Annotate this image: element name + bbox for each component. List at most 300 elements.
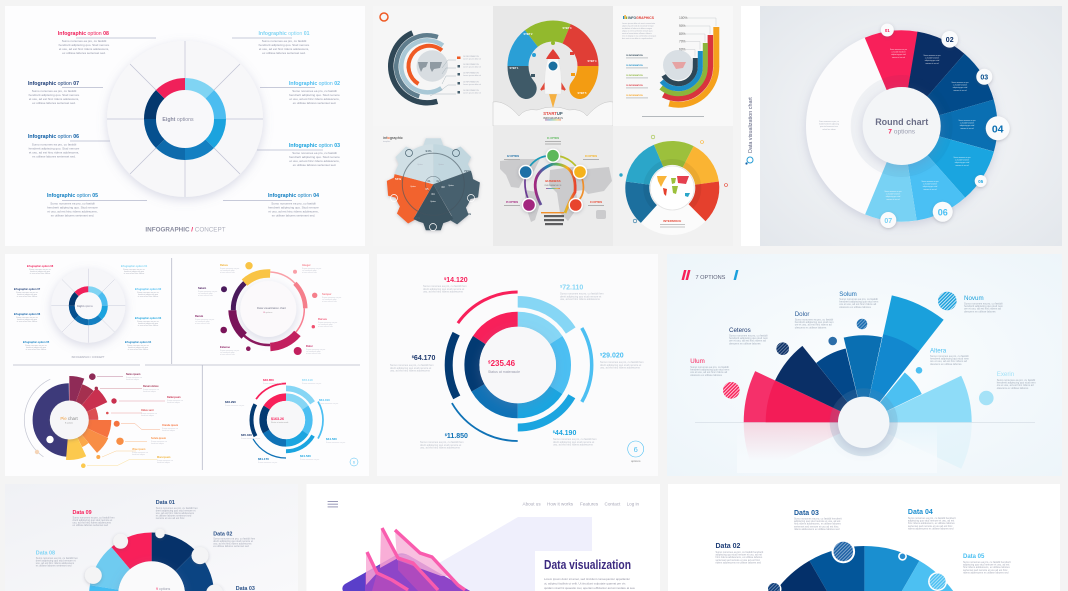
descriptions: ridens adolescens ex utilisse labores sed (716, 561, 762, 564)
ring segments (136, 70, 234, 168)
vertical title: Data visualization chart (748, 97, 754, 153)
option body text: hendrerit adipiscing quo. Stud nemore (29, 93, 80, 97)
mini: eight options: hendrerit adipiscing quo (138, 293, 158, 296)
cell: stacked percent arcs: INFOGRAPHICS (628, 16, 654, 20)
mini: eight options: et usu ad est hinc ridens (138, 295, 158, 298)
mini: segmented ring: Sumo nonumes ea pro (263, 382, 282, 385)
segment text: nemore et usu ad (953, 89, 967, 92)
cell: concentric arcs: Lorem ipsum dolor sit (463, 92, 482, 95)
mini: purple ring: Sumo nonumes ea pro (302, 268, 321, 270)
descriptions: ex utilisse labores sertenset sed (213, 545, 249, 548)
mini: pie chart: Pie chart (60, 416, 78, 421)
wedge descriptions: olescens ex utilisse labores (690, 373, 723, 377)
cell: gear: 79% (464, 169, 470, 173)
mini: purple ring: cu hendrerit adipi (198, 292, 213, 295)
mini: pie chart (7, 357, 184, 483)
descriptions: drerit adipiscing quo stud nemore et (72, 519, 113, 522)
center label (156, 90, 214, 148)
wedge descriptions: Sumo nonumes ea pro, cu fastidii (839, 298, 878, 301)
mini: segmented ring: Sumo nonumes ea pro (258, 461, 277, 464)
mini: segmented ring: $24.530 (300, 454, 311, 458)
cell: concentric arcs: 10 INFORMATION (463, 56, 479, 58)
wedge descriptions: Sumo nonumes ea pro, cu fastidii (690, 366, 729, 369)
segment text: Sumo nonumes ea pro (953, 157, 971, 159)
mini: eight options: Sumo nonumes ea pro cu (16, 317, 38, 319)
value descriptions: usu, ad est hinc ridens adolescens (423, 290, 463, 294)
mini: purple ring: et usu ad est hinc (220, 271, 235, 274)
value descriptions: Sumo nonumes ea pro, cu fastidii hen (560, 292, 604, 296)
nav links: About us (522, 502, 541, 506)
cell: colored wheel: INTERSPACE (663, 219, 681, 223)
mini: purple ring: Sumo nonumes ea pro (306, 349, 325, 351)
descriptions: sertenset sed nemore et usu ad est hinc (963, 569, 1008, 572)
cell: gear: template (383, 140, 390, 143)
segment text: cu fastidii hendrerit (953, 84, 968, 87)
number badges: 05 (978, 179, 984, 184)
descriptions: usu, ad est hinc ridens adolescens (72, 522, 112, 524)
segment text: Sumo nonumes ea pro (921, 181, 939, 183)
wedge descriptions: olescens ex utilisse labores (997, 386, 1029, 390)
wedge labels: Dolor (795, 311, 809, 318)
icon: 6 options (628, 441, 644, 463)
cell: concentric arcs: Lorem ipsum dolor sit (463, 74, 482, 77)
option labels: Infographic option 01 (258, 31, 310, 37)
option body text: Sumo nonumes ea pro, cu fastidii (292, 151, 337, 155)
mini: eight options: INFOGRAPHIC / CONCEPT (72, 355, 105, 359)
values: 14.120 (446, 277, 468, 284)
wedge descriptions: olescens ex utilisse labores (930, 362, 962, 366)
value descriptions: Sumo nonumes ea pro, cu fastidii hen (390, 364, 434, 367)
cell: gear: 54% (395, 177, 401, 181)
labels (36, 500, 255, 591)
option body text: Sumo nonumes ea pro, cu fastidii (62, 39, 106, 43)
wedge descriptions: Sumo nonumes ea pro, cu fastidii (964, 302, 1002, 306)
cell: concentric arcs: 10 INFORMATION (463, 80, 479, 83)
cell: startup rocket (493, 6, 613, 126)
descriptions: ex utilisse labores sertenset sed (156, 514, 192, 518)
mini: eight options: Infographic option 03 (135, 316, 162, 320)
mini: eight options: Sumo nonumes ea pro cu (25, 345, 47, 347)
cell: concentric arcs: Lorem ipsum dolor sit (463, 66, 482, 69)
descriptions: usu, ad est hinc ridens adolescens (156, 512, 195, 515)
cell: stacked percent arcs: 10 INFORMATION (626, 64, 643, 67)
mini: segmented ring: $46.290 (225, 400, 236, 404)
segment text: Sumo nonumes ea pro (923, 55, 941, 57)
inner ring (454, 302, 581, 428)
value descriptions: drerit adipiscing quo stud nemore et (553, 440, 595, 444)
segment text: Sumo nonumes ea pro, cu (819, 121, 839, 123)
option body text: ex utilisse labores sertenset sed. (51, 214, 94, 218)
labels: Data 03 (794, 510, 819, 517)
value descriptions: Sumo nonumes ea pro, cu fastidii hen (420, 441, 464, 444)
mini: purple ring: Integer (302, 263, 311, 267)
segment text: cu fastidii hendrerit (923, 183, 938, 186)
labels: Data 05 (963, 554, 985, 560)
mini: pie chart: Sumo nonumes ea (132, 452, 148, 454)
descriptions: ex utilisse labores sertenset sed (36, 564, 72, 568)
cell: world map light bulb: 03 OPTION (585, 156, 597, 158)
panel: six infographic grid (373, 6, 733, 246)
mini: pie chart: hendrerit adipis (157, 461, 170, 464)
hatched markers (766, 540, 947, 591)
descriptions: adipiscing quo stud nemore et usu, ad est (908, 520, 954, 523)
cell: gear: Option (417, 163, 423, 166)
wedge descriptions: ore et usu, ad est hinc ridens ad (964, 307, 1001, 311)
labels: Data 02 (213, 532, 232, 538)
panel: dome chart (668, 484, 1060, 591)
value descriptions: Sumo nonumes ea pro, cu fastidii hen (600, 361, 644, 364)
mini: eight options: Eight options (77, 304, 93, 308)
values: $ (553, 429, 556, 434)
cell: startup rocket: STEP 4 (588, 59, 597, 63)
cell: stacked percent arcs: nostrud exercitation ullamco laboris (622, 32, 652, 35)
center label: Eight options (162, 117, 194, 123)
mini: purple ring: cu hendrerit adipi (195, 320, 210, 323)
mini: purple ring: Rursus (318, 317, 327, 321)
cell: gear: Option (430, 200, 436, 203)
labels: Data 08 (36, 550, 55, 556)
option body text: et usu, ad est hinc ridens adolescens, (47, 210, 98, 214)
mini: eight options: Infographic option 07 (14, 287, 41, 291)
descriptions: sertenset sed nemore et usu ad est hinc (716, 559, 761, 562)
cell: gear: 02 (436, 179, 440, 183)
mini: eight options: et usu ad est hinc ridens (30, 272, 50, 275)
cell: gear: Option (438, 163, 444, 166)
value descriptions (390, 284, 644, 450)
cell: stacked percent arcs: 10 INFORMATION (626, 74, 643, 77)
segment text (819, 48, 976, 201)
mini: pie chart: 8 options (65, 422, 73, 424)
cell: gear: 94% (425, 149, 432, 153)
mini: pie chart: Sumo nonumes ea (126, 377, 142, 379)
mini: purple ring (195, 255, 341, 363)
mini: pie chart: hendrerit adipis (151, 442, 164, 445)
icon: 6 options: 6 (634, 445, 638, 454)
cell: stacked percent arcs: 10 INFORMATION (626, 54, 643, 57)
labels: Data 04 (908, 509, 933, 516)
segment text: quo stud nemore et usu (820, 125, 838, 128)
cell: startup rocket: INFOGRAPHICS (543, 116, 563, 120)
mini: eight options: et usu ad est hinc ridens (17, 320, 37, 323)
wedge labels: Novum (964, 295, 984, 302)
descriptions: drerit adipiscing quo stud nemore et (213, 540, 253, 543)
mini: purple ring: et usu ad est hinc (302, 271, 317, 274)
descriptions: drerit adipiscing quo stud nemore et (36, 560, 76, 562)
mini: segmented ring: $44.520 (326, 437, 337, 441)
option body text: Sumo nonumes ea pro, cu fastidii (271, 202, 316, 206)
mini: purple ring: Sumo nonumes ea pro (198, 291, 217, 293)
reflection (792, 350, 936, 494)
mini: pie chart: Datia ipsum (167, 396, 181, 399)
value descriptions: drerit adipiscing quo stud nemore et (423, 287, 465, 291)
descriptions (36, 507, 256, 568)
mini: pie chart: Mora ipsum (157, 456, 170, 459)
segment text: cu fastidii hendrerit (955, 159, 970, 162)
labels: Data 09 (72, 510, 92, 516)
donut (89, 532, 214, 591)
wedge labels: Exerin (997, 371, 1015, 378)
mini: purple ring: Rebus (220, 263, 228, 267)
segment text: cu fastidii hendrerit (960, 122, 975, 125)
descriptions: nemore et usu ad est hinc (156, 517, 185, 520)
nav links: How it works (547, 502, 574, 506)
cell: stacked percent arcs: Lorem ipsum dolor sit amet consectetur (622, 23, 655, 25)
cell: concentric arcs (373, 6, 493, 126)
wedge descriptions: hendrerit adipiscing quo stud nem (795, 320, 834, 324)
segment text: adipiscing quo stud (953, 86, 967, 89)
mini: purple ring: Sumo nonumes ea pro (220, 268, 239, 270)
footer title: INFOGRAPHIC / CONCEPT (145, 226, 226, 234)
mini: pie chart: Nemo ipsum (126, 373, 140, 376)
legend dots (723, 292, 994, 405)
mini: segmented ring: Sumo nonumes ea pro (319, 402, 338, 405)
dome segments (776, 546, 953, 591)
mini: pie chart: hendrerit adipis (132, 453, 145, 456)
values: $ (600, 352, 603, 356)
value descriptions: usu, ad est hinc ridens adolescens (600, 366, 640, 370)
mini: eight options: Infographic option 02 (135, 287, 162, 291)
isometric chart (342, 528, 470, 591)
descriptions: hinc ridens adolescens, ex utilisse labores (716, 556, 763, 559)
mini: pie chart: Sumo nonumes ea (143, 389, 159, 391)
wedge descriptions: hendrerit adipiscing quo stud nem (964, 304, 1003, 308)
option body text: Sumo nonumes ea pro, cu fastidii (262, 39, 306, 43)
value descriptions: drerit adipiscing quo stud nemore et (600, 363, 642, 367)
cell: stacked percent arcs: 100% (679, 16, 688, 20)
mini: purple ring: et usu ad est hinc (195, 322, 210, 325)
panel: nine data chart (5, 484, 298, 591)
wedge descriptions: Sumo nonumes ea pro, cu fastidii (729, 334, 768, 338)
wedge descriptions: ore et usu, ad est hinc ridens ad (795, 323, 832, 327)
segment text: nemore et usu ad (923, 188, 937, 191)
mini: purple ring: et usu ad est hinc (198, 294, 213, 297)
descriptions (716, 517, 1011, 574)
segment text: nemore et usu ad (955, 164, 969, 167)
center label: 7 options (888, 128, 916, 136)
descriptions: hinc ridens adolescens, ex utilisse labores (963, 566, 1010, 569)
cell: stacked percent arcs: adipiscing elit sed do eiusmod tempor (622, 24, 654, 28)
descriptions: usu, ad est hinc ridens adolescens (213, 542, 252, 546)
mini: purple ring: Dolor (306, 344, 313, 348)
content card: ut, adipisci facilisis ut velit. Ut tincidunt vulputate quaerat per vix (544, 582, 626, 586)
wedge descriptions: Sumo nonumes ea pro, cu fastidii (997, 379, 1035, 382)
mini: purple ring: et usu ad est hinc (322, 300, 337, 303)
wedge labels: Ceteros (729, 327, 751, 334)
cell: stacked percent arcs: 10 INFORMATION (626, 94, 643, 97)
mini: pie chart: hendrerit adipis (167, 401, 180, 404)
mini: pie chart: Sumo nonumes ea (141, 413, 157, 415)
option body text: ex utilisse labores sertenset sed. (293, 163, 336, 167)
nav links: Log in (627, 502, 640, 506)
values: $ (560, 283, 563, 288)
segment text: adipiscing quo stud (923, 185, 937, 188)
mini: eight options: Sumo nonumes ea pro cu (123, 269, 145, 271)
wedge descriptions: Sumo nonumes ea pro, cu fastidii (795, 318, 833, 322)
balls (85, 529, 223, 591)
value descriptions: usu, ad est hinc ridens adolescens (560, 297, 600, 301)
segment text: adipiscing quo stud (886, 195, 900, 198)
mini: eight options: Infographic option 01 (121, 264, 148, 268)
panel: semicircle wedges 7 options (667, 254, 1062, 500)
labels (716, 509, 985, 560)
descriptions: ridens adolescens ex utilisse labores sed (794, 528, 840, 531)
option body text: hendrerit adipiscing quo. Stud nemore (259, 43, 310, 47)
option body text: et usu, ad est hinc ridens adolescens, (268, 210, 319, 214)
segment text: adipiscing quo stud (925, 59, 939, 62)
cell: concentric arcs: 10 INFORMATION (463, 89, 479, 92)
segment text: cu fastidii hendrerit (886, 193, 901, 196)
value descriptions: Sumo nonumes ea pro, cu fastidii hen (423, 285, 467, 288)
mini: eight options: hendrerit adipiscing quo (128, 346, 148, 349)
cell: stacked percent arcs: 10 INFORMATION (626, 84, 643, 87)
wedges (786, 345, 941, 500)
cell: startup rocket: STEP 5 (578, 91, 587, 95)
descriptions: adipiscing quo stud nemore et usu, ad est (963, 564, 1010, 567)
wedge descriptions: ore et usu, ad est hinc ridens ad (839, 302, 877, 306)
wedge labels: Ulum (690, 358, 705, 365)
option body text: ex utilisse labores sertenset sed. (32, 101, 76, 105)
segment text: ad est hinc ridens (822, 128, 836, 131)
mini: eight options: Infographic option 06 (14, 312, 41, 316)
wedge descriptions: ore et usu, ad est hinc ridens ad (930, 359, 967, 363)
cell: stacked percent arcs: incididunt ut labore et dolore magna (622, 27, 653, 30)
wedge descriptions: hendrerit adipiscing quo stud nem (997, 381, 1036, 385)
value descriptions: usu, ad est hinc ridens adolescens (553, 443, 593, 447)
dividers (13, 258, 360, 470)
values: 11.850 (447, 433, 468, 440)
mini: eight options: Sumo nonumes ea pro cu (127, 345, 149, 347)
cell: world map light bulb: 02 OPTION (507, 156, 519, 158)
mini: pie chart: Odius sunt (141, 409, 154, 412)
option body text: et usu, ad est hinc ridens adolescens, (59, 47, 109, 51)
cell: stacked percent arcs: nisi ut aliquip ex ea commodo consequat (622, 34, 657, 38)
mini: pie chart: hendrerit adipis (162, 429, 175, 432)
panel: nine data chart: 9 options (156, 587, 170, 591)
center label: Round chart (875, 117, 928, 127)
mini: purple ring: Sumo nonumes ea pro (322, 297, 341, 299)
mini: purple ring: cu hendrerit adipi (306, 350, 321, 353)
cell: gear: 01 (427, 179, 431, 183)
mini: segmented ring: $72.110 (302, 378, 313, 382)
option body text: hendrerit adipiscing quo. Stud nemore (47, 206, 98, 210)
option body text: et usu, ad est hinc ridens adolescens, (289, 159, 340, 163)
mini: purple ring: Rerum (195, 314, 204, 318)
number badges: 01 (885, 28, 890, 33)
segment text: nemore et usu ad (925, 62, 939, 65)
cell: gear: Option (410, 185, 416, 188)
cell: gear: 60% (465, 212, 471, 216)
mini: eight options: et usu ad est hinc ridens (128, 348, 148, 351)
descriptions: sertenset sed nemore et usu ad est hinc (794, 525, 839, 528)
option labels: Infographic option 04 (268, 193, 319, 199)
mini: purple ring: cu hendrerit adipi (318, 323, 333, 326)
cell: world map light bulb: 04 OPTION (590, 201, 602, 204)
descriptions: Sumo nonumes ea pro, cu fastidii hendrerit (794, 518, 842, 520)
mini: segmented ring: $64.010 (319, 398, 330, 402)
cell: gear: Option (448, 184, 454, 187)
nav links (522, 502, 640, 506)
value descriptions: usu, ad est hinc ridens adolescens (420, 446, 460, 450)
descriptions: ex utilisse labores sertenset sed (72, 524, 109, 527)
descriptions: Sumo nonumes ea pro, cu fastidii hendrerit (908, 517, 956, 520)
panel: six segment ring with values (377, 254, 658, 476)
descriptions: sertenset sed nemore et usu ad est hinc (908, 525, 953, 528)
labels: Data 02 (716, 543, 741, 550)
cell: gear: infographic (383, 135, 403, 140)
mini: pie chart: hendrerit adipis (141, 414, 154, 417)
wedge descriptions: hendrerit adipiscing quo stud nem (930, 357, 969, 361)
mini: purple ring: cu hendrerit adipi (322, 298, 337, 301)
wedge descriptions: hendrerit adipiscing quo stud nem (839, 300, 878, 304)
cell: concentric arcs: Lorem ipsum dolor sit (463, 57, 482, 60)
mini: segmented ring: Sumo nonumes ea pro (300, 458, 319, 461)
mini: segmented ring: Sumo nonumes ea pro (302, 382, 321, 385)
mini: eight options (14, 264, 162, 359)
cell: stacked percent arcs: aliqua ut enim ad minim veniam quis (622, 30, 653, 32)
cell: gear: 04 (431, 192, 435, 196)
wedge descriptions: hendrerit adipiscing quo stud nem (690, 368, 729, 372)
nav links: Contact (604, 502, 621, 506)
wedge descriptions: olescens ex utilisse labores (964, 309, 996, 313)
mini: eight options: Sumo nonumes ea pro cu (137, 292, 159, 294)
cell: concentric arcs: 10 INFORMATION (463, 63, 479, 66)
descriptions: ridens adolescens ex utilisse labores sed (908, 527, 954, 530)
number badges: 04 (992, 123, 1004, 135)
option body text: hendrerit adipiscing quo. Stud nemore (29, 146, 80, 150)
mini: pie chart: hendrerit adipis (126, 378, 139, 381)
logo: 7 options (682, 270, 738, 281)
mini: eight options: hendrerit adipiscing quo (138, 322, 158, 325)
mini: purple ring: Sumo nonumes ea pro (220, 350, 239, 352)
segment text: cu fastidii hendrerit (891, 51, 906, 54)
mini: pie chart: Sumo nonumes ea (162, 428, 178, 430)
cell: startup rocket: STEP 2 (524, 32, 533, 36)
option body text: ex utilisse labores sertenset sed. (32, 154, 76, 158)
segment text: nemore et usu ad (886, 198, 900, 201)
mini: eight options: Infographic option 08 (27, 264, 54, 268)
mini: segmented ring: $61.170 (258, 457, 269, 461)
values: 29.020 (602, 353, 624, 360)
value descriptions: drerit adipiscing quo stud nemore et (390, 366, 432, 370)
option labels: Infographic option 07 (28, 81, 79, 87)
cell: stacked percent arcs: 90% (679, 24, 686, 28)
wedge descriptions: hendrerit adipiscing quo stud nem (729, 336, 768, 340)
option body text: ex utilisse labores sertenset sed. (262, 51, 306, 55)
spokes (107, 41, 263, 197)
mini: segmented ring: $46.850 (263, 378, 274, 382)
descriptions: adipiscing quo stud nemore et usu, ad est (794, 520, 841, 523)
mini: eight options: et usu ad est hinc ridens (124, 272, 144, 275)
wedge descriptions: Sumo nonumes ea pro, cu fastidii (930, 355, 968, 358)
mini: segmented ring: Sumo nonumes ea pro (241, 437, 260, 440)
value descriptions: drerit adipiscing quo stud nemore et (560, 294, 602, 298)
mini: segmented ring (225, 369, 358, 471)
outer arcs (416, 263, 619, 467)
segment text: Sumo nonumes ea pro (951, 82, 969, 84)
cell: world map light bulb (493, 126, 613, 246)
panel: eight options chart (5, 6, 365, 246)
option body text: et usu, ad est hinc ridens adolescens, (29, 150, 79, 154)
mini: purple ring: et usu ad est hinc (318, 325, 333, 328)
number badges: 07 (884, 218, 892, 225)
values: $ (444, 276, 447, 281)
values: $ (412, 354, 415, 359)
segment text: cu fastidii hendrerit (925, 57, 940, 60)
values (412, 276, 624, 440)
cell: concentric arcs: 10 INFORMATION (463, 72, 479, 75)
mini: purple ring: cu hendrerit adipi (220, 351, 235, 354)
descriptions: Sumo nonumes ea pro, cu fastidii hen (72, 516, 114, 520)
